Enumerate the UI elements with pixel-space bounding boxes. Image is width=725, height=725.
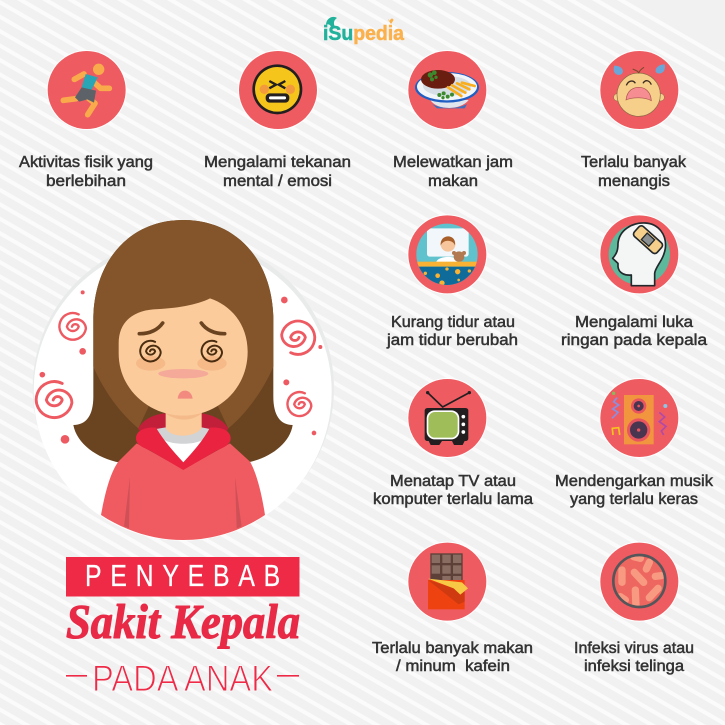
label: mental / emosi [223,173,332,190]
neck [166,407,202,457]
icon: chocolate bar [407,542,487,622]
icon: stressed face [238,50,318,130]
panel: mental stress [204,50,351,190]
panel: lack of sleep [386,214,518,349]
subheading: PADA ANAK [92,658,273,699]
icon: television [407,378,487,458]
label: Terlalu banyak makan [372,640,533,657]
panel: physical activity [19,50,153,190]
label: Mengalami luka [575,314,693,331]
label: menangis [598,173,670,190]
nose blush [158,369,208,378]
panel: caffeine [372,542,533,675]
label [393,154,513,190]
eyebrows [139,323,225,334]
title banner: PENYEBAB [85,558,280,593]
icon: bacteria [599,542,679,622]
label [373,473,533,508]
label [555,473,713,508]
label: Terlalu banyak [581,154,686,171]
label: Kurang tidur atau [391,314,515,331]
label: Mengalami tekanan [204,154,351,171]
mouth [178,391,193,399]
label [372,640,533,675]
label [204,154,351,190]
label: jam tidur berubah [386,332,518,349]
panel: minor head injury [561,214,707,349]
icon: runner [47,50,127,130]
label [561,314,707,349]
hood collar [136,427,231,470]
hair front [93,220,273,428]
icon: plate of food [407,50,487,130]
sweater [101,443,265,540]
script heading: Sakit Kepala [66,594,300,649]
cheeks [136,356,227,371]
dizzy spirals and dots [36,290,322,444]
icon: child in bed [407,214,487,294]
label: Infeksi virus atau [574,640,694,657]
label: / minum kafein [396,658,510,675]
face [119,298,248,416]
logo: iSupedia: iSupedia [323,23,405,45]
icon: crying baby [599,50,679,130]
dizzy eyes [140,341,222,361]
icon: speaker [599,378,679,458]
hair back [73,220,293,463]
label [19,154,153,190]
panel: girl illustration [33,220,334,541]
title block [66,557,300,699]
icon: bandaged head [599,214,679,294]
label: Melewatkan jam [393,154,513,171]
label [581,154,686,190]
panel: too much screen time [373,378,533,508]
hood back [138,413,228,443]
label: komputer terlalu lama [373,491,533,508]
panel: loud music [555,378,713,508]
label: makan [428,173,478,190]
collar [156,427,210,462]
label: Mendengarkan musik [555,473,713,490]
label: infeksi telinga [584,658,684,675]
panel: infection [574,542,694,675]
label: berlebihan [46,173,126,190]
label: ringan pada kepala [561,332,707,349]
label [574,640,694,675]
label [386,314,518,349]
circle backdrop [33,238,334,541]
label: Menatap TV atau [390,473,516,490]
label: Aktivitas fisik yang [19,154,153,171]
panel: skipped meals [393,50,513,190]
label: yang terlalu keras [570,491,698,508]
panel: too much crying [581,50,686,190]
